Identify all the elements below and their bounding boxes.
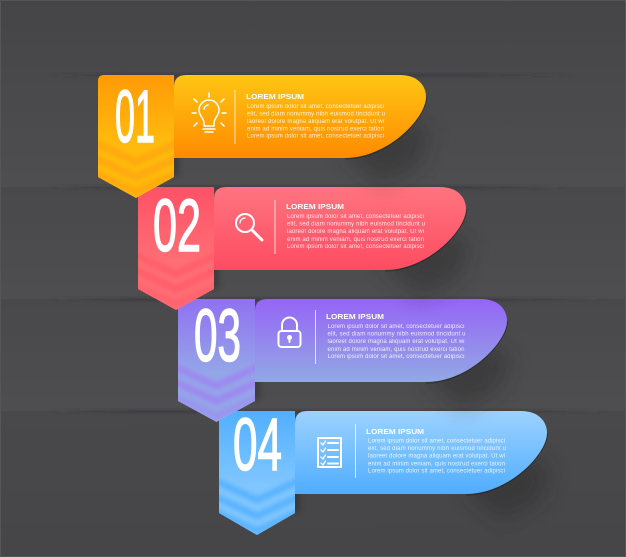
divider: [355, 424, 356, 478]
ribbon: [93, 75, 179, 198]
body text: Lorem ipsum dolor sit amet, consectetuer adipisci: [328, 354, 464, 360]
body text: [247, 104, 385, 140]
body text: elit, sed diam nonummy nibh euismod tincidunt u: [287, 222, 425, 228]
panel: step 02: [133, 184, 470, 310]
card body: [255, 299, 507, 382]
heading: LOREM IPSUM: [286, 204, 344, 211]
number: 02: [153, 184, 201, 267]
divider: [274, 200, 276, 254]
body text: Lorem ipsum dolor sit amet, consectetuer adipisci: [328, 324, 464, 330]
divider: [234, 90, 236, 144]
card body: [214, 187, 466, 270]
body text: elit, sed diam nonummy nibh euismod tincidunt u: [247, 112, 385, 118]
body text: Lorem ipsum dolor sit amet, consectetuer adipisci: [247, 104, 384, 110]
number: 03: [194, 294, 241, 377]
panel: step 01: [93, 75, 430, 198]
card body: [295, 411, 547, 494]
card edge: [466, 433, 548, 495]
body text: enim ad minim veniam, quis nostrud exerci tation: [328, 347, 464, 353]
body text: [287, 214, 425, 250]
panel: step 03: [173, 294, 511, 422]
card edge: [345, 97, 426, 159]
ribbon: [214, 411, 300, 535]
body text: Lorem ipsum dolor sit amet, consectetuer adipisci: [287, 244, 424, 250]
body text: Lorem ipsum dolor sit amet, consectetuer adipisci: [368, 468, 505, 474]
icon: checklist: [318, 438, 341, 467]
body text: enim ad minim veniam, quis nostrud exerci tation: [368, 462, 505, 468]
body text: Lorem ipsum dolor sit amet, consectetuer adipisci: [368, 438, 505, 444]
icon: magnifying glass: [236, 214, 262, 240]
heading: LOREM IPSUM: [246, 94, 304, 101]
body text: enim ad minim veniam, quis nostrud exerci tation: [287, 237, 424, 243]
heading: LOREM IPSUM: [326, 314, 384, 321]
card shadow: [380, 232, 470, 297]
panel: step 01: 01: [115, 75, 155, 158]
body text: elit, sed diam nonummy nibh euismod tincidunt u: [328, 332, 466, 338]
body text: Lorem ipsum dolor sit amet, consectetuer adipisci: [247, 134, 384, 140]
card edge: [426, 321, 508, 383]
icon: light bulb: [192, 93, 226, 132]
card body: [174, 75, 426, 158]
ribbon: [133, 187, 219, 310]
body text: [328, 324, 466, 360]
body text: laoreet dolore magna aliquam erat volutpat. Ut wi: [287, 229, 424, 235]
body text: enim ad minim veniam, quis nostrud exerci tation: [247, 126, 384, 132]
body text: [368, 438, 506, 474]
body text: laoreet dolore magna aliquam erat volutpat. Ut wi: [247, 119, 384, 125]
ribbon: [173, 299, 260, 422]
divider: [315, 310, 316, 364]
card shadow: [421, 344, 511, 409]
body text: laoreet dolore magna aliquam erat volutpat. Ut wi: [328, 339, 464, 345]
panel: step 04: [214, 403, 551, 535]
card shadow: [340, 120, 430, 185]
card edge: [385, 209, 466, 271]
number: 04: [233, 403, 282, 486]
body text: Lorem ipsum dolor sit amet, consectetuer adipisci: [287, 214, 424, 220]
body text: elit, sed diam nonummy nibh euismod tincidunt u: [368, 446, 506, 452]
body text: laoreet dolore magna aliquam erat volutpat. Ut wi: [368, 454, 505, 460]
card shadow: [461, 456, 551, 521]
heading: LOREM IPSUM: [366, 429, 424, 436]
icon: padlock: [278, 318, 300, 347]
